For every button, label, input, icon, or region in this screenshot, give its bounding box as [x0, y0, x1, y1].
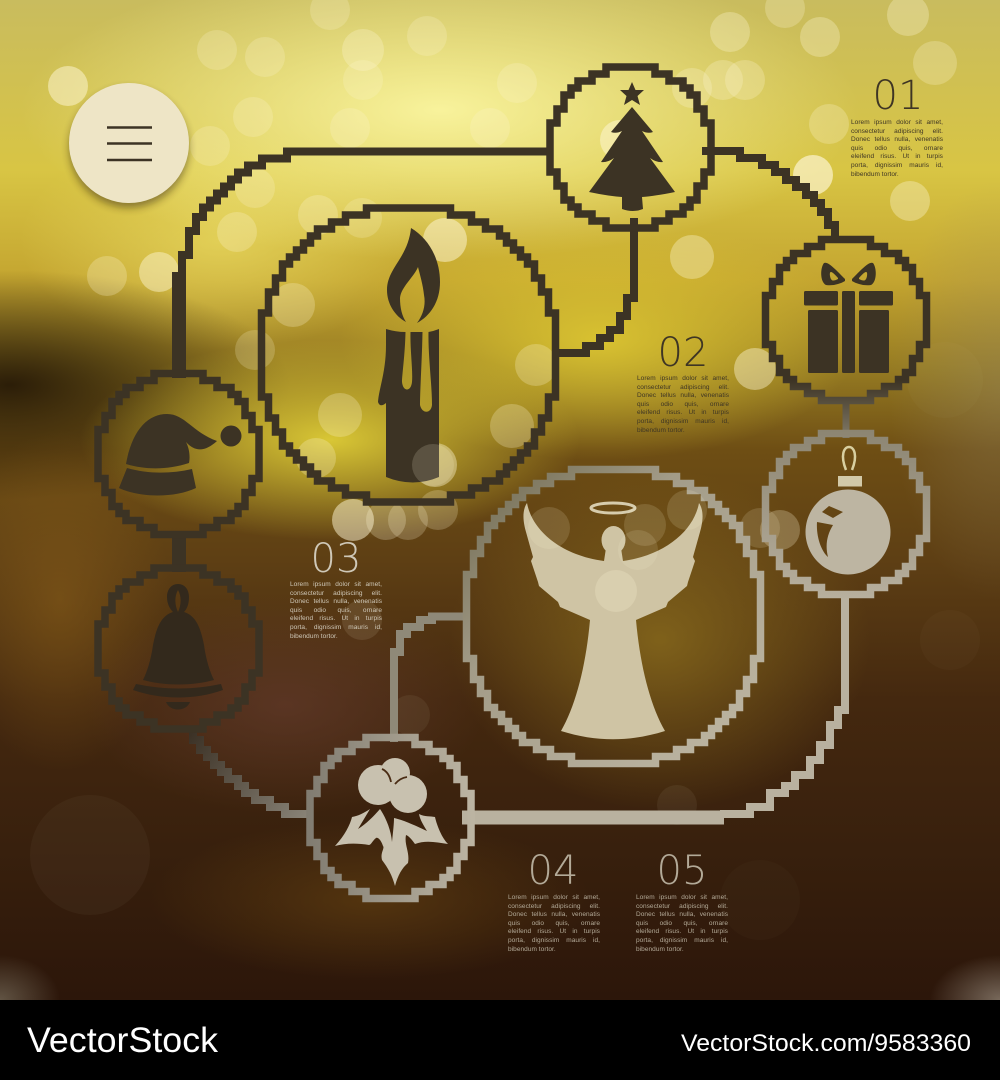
step 03 text: consectetur adipiscing elit.: [290, 590, 382, 597]
ring: candle: [262, 208, 556, 502]
ring: holly: [310, 738, 471, 898]
icon: santa hat: [119, 414, 242, 496]
step 05 text: Donec tellus nulla, venenatis: [636, 911, 728, 918]
step 03 text: Donec tellus nulla, venenatis: [290, 598, 382, 605]
menu button: [69, 83, 189, 208]
icon: gift: [804, 263, 893, 373]
step 02 text: consectetur adipiscing elit.: [637, 384, 729, 391]
ring: hat: [98, 374, 259, 534]
step 04 text: eleifend risus. Ut in turpis: [508, 928, 600, 935]
ring: bell: [98, 568, 259, 729]
step 05 text: bibendum tortor.: [636, 946, 684, 953]
step 03 text: bibendum tortor.: [290, 633, 338, 640]
step 02 number: 02: [658, 330, 708, 376]
connector: stem to hat: [172, 272, 186, 378]
connector: tree to hat arc: [182, 152, 550, 280]
step 04 text: Lorem ipsum dolor sit amet,: [508, 894, 600, 901]
footer brand: VectorStock: [27, 1021, 219, 1060]
step 01 text: [851, 119, 943, 178]
step 03 number: 03: [311, 536, 361, 582]
step 01 text: porta, dignissim mauris id,: [851, 162, 943, 169]
icon: angel: [523, 503, 703, 739]
step 04 text: Donec tellus nulla, venenatis: [508, 911, 600, 918]
connector: holly to angel: [394, 616, 465, 742]
bokeh overlay: [412, 444, 707, 612]
step 04 text: [508, 894, 600, 953]
step 05 text: eleifend risus. Ut in turpis: [636, 928, 728, 935]
step 03 text: eleifend risus. Ut in turpis: [290, 615, 382, 622]
connector: hat to bell: [172, 532, 186, 572]
connector: bell to holly: [193, 726, 312, 814]
step 01 number: 01: [873, 73, 923, 119]
step 01 text: quis odio quis, ornare: [851, 145, 943, 152]
step 04 text: porta, dignissim mauris id,: [508, 937, 600, 944]
step 05 text: porta, dignissim mauris id,: [636, 937, 728, 944]
step 03 text: [290, 581, 382, 640]
step 05 text: quis odio quis, ornare: [636, 920, 728, 927]
connector: tree to gift: [702, 151, 835, 240]
step 04 text: bibendum tortor.: [508, 946, 556, 953]
step 01 text: Lorem ipsum dolor sit amet,: [851, 119, 943, 126]
step 04 number: 04: [528, 848, 578, 894]
connector: bar to ornament: [720, 595, 845, 814]
ring: ornament: [766, 434, 926, 594]
step 03 text: quis odio quis, ornare: [290, 607, 382, 614]
ring: gift: [766, 240, 926, 400]
step 02 text: Lorem ipsum dolor sit amet,: [637, 375, 729, 382]
icon: ornament: [806, 447, 891, 574]
icon: christmas tree: [589, 82, 675, 211]
step 05 text: [636, 894, 728, 953]
step 03 text: Lorem ipsum dolor sit amet,: [290, 581, 382, 588]
step 02 text: quis odio quis, ornare: [637, 401, 729, 408]
step 05 text: Lorem ipsum dolor sit amet,: [636, 894, 728, 901]
step 02 text: eleifend risus. Ut in turpis: [637, 409, 729, 416]
icon: candle: [378, 228, 440, 482]
connector: holly to ornament bar: [462, 810, 724, 824]
step 02 text: [637, 375, 729, 434]
step 05 number: 05: [657, 848, 707, 894]
step 04 text: consectetur adipiscing elit.: [508, 903, 600, 910]
step 01 text: eleifend risus. Ut in turpis: [851, 153, 943, 160]
step 02 text: bibendum tortor.: [637, 427, 685, 434]
step 05 text: consectetur adipiscing elit.: [636, 903, 728, 910]
step 04 text: quis odio quis, ornare: [508, 920, 600, 927]
step 01 text: Donec tellus nulla, venenatis: [851, 136, 943, 143]
step 01 text: consectetur adipiscing elit.: [851, 128, 943, 135]
connector: tree to candle: [556, 218, 634, 353]
step 02 text: Donec tellus nulla, venenatis: [637, 392, 729, 399]
ring: angel: [466, 470, 760, 764]
icon: holly: [335, 758, 448, 886]
step 02 text: porta, dignissim mauris id,: [637, 418, 729, 425]
footer bar: [0, 1000, 1000, 1080]
footer id: VectorStock.com/9583360: [681, 1030, 971, 1057]
icon: bell: [133, 584, 223, 710]
ring: tree: [550, 67, 711, 228]
step 03 text: porta, dignissim mauris id,: [290, 624, 382, 631]
step 01 text: bibendum tortor.: [851, 171, 899, 178]
connector: gift to ornament: [842, 398, 850, 438]
